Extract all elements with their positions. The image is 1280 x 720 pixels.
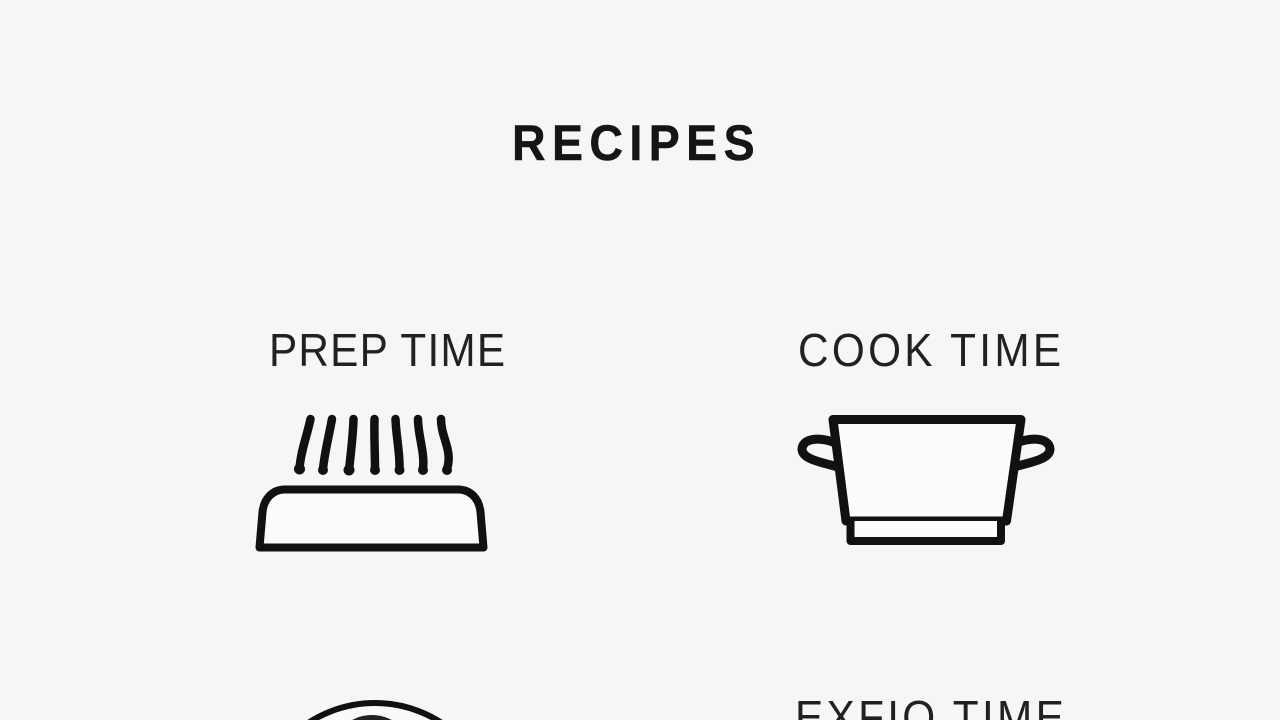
title: RECIPES — [512, 115, 761, 171]
icon: clock (cropped) — [254, 703, 496, 720]
heading: cook time: COOK TIME — [798, 325, 1064, 376]
icon: steaming dish — [260, 419, 484, 548]
heading: prep time: PREP TIME — [269, 325, 506, 376]
icon: cooking pot — [802, 420, 1050, 541]
